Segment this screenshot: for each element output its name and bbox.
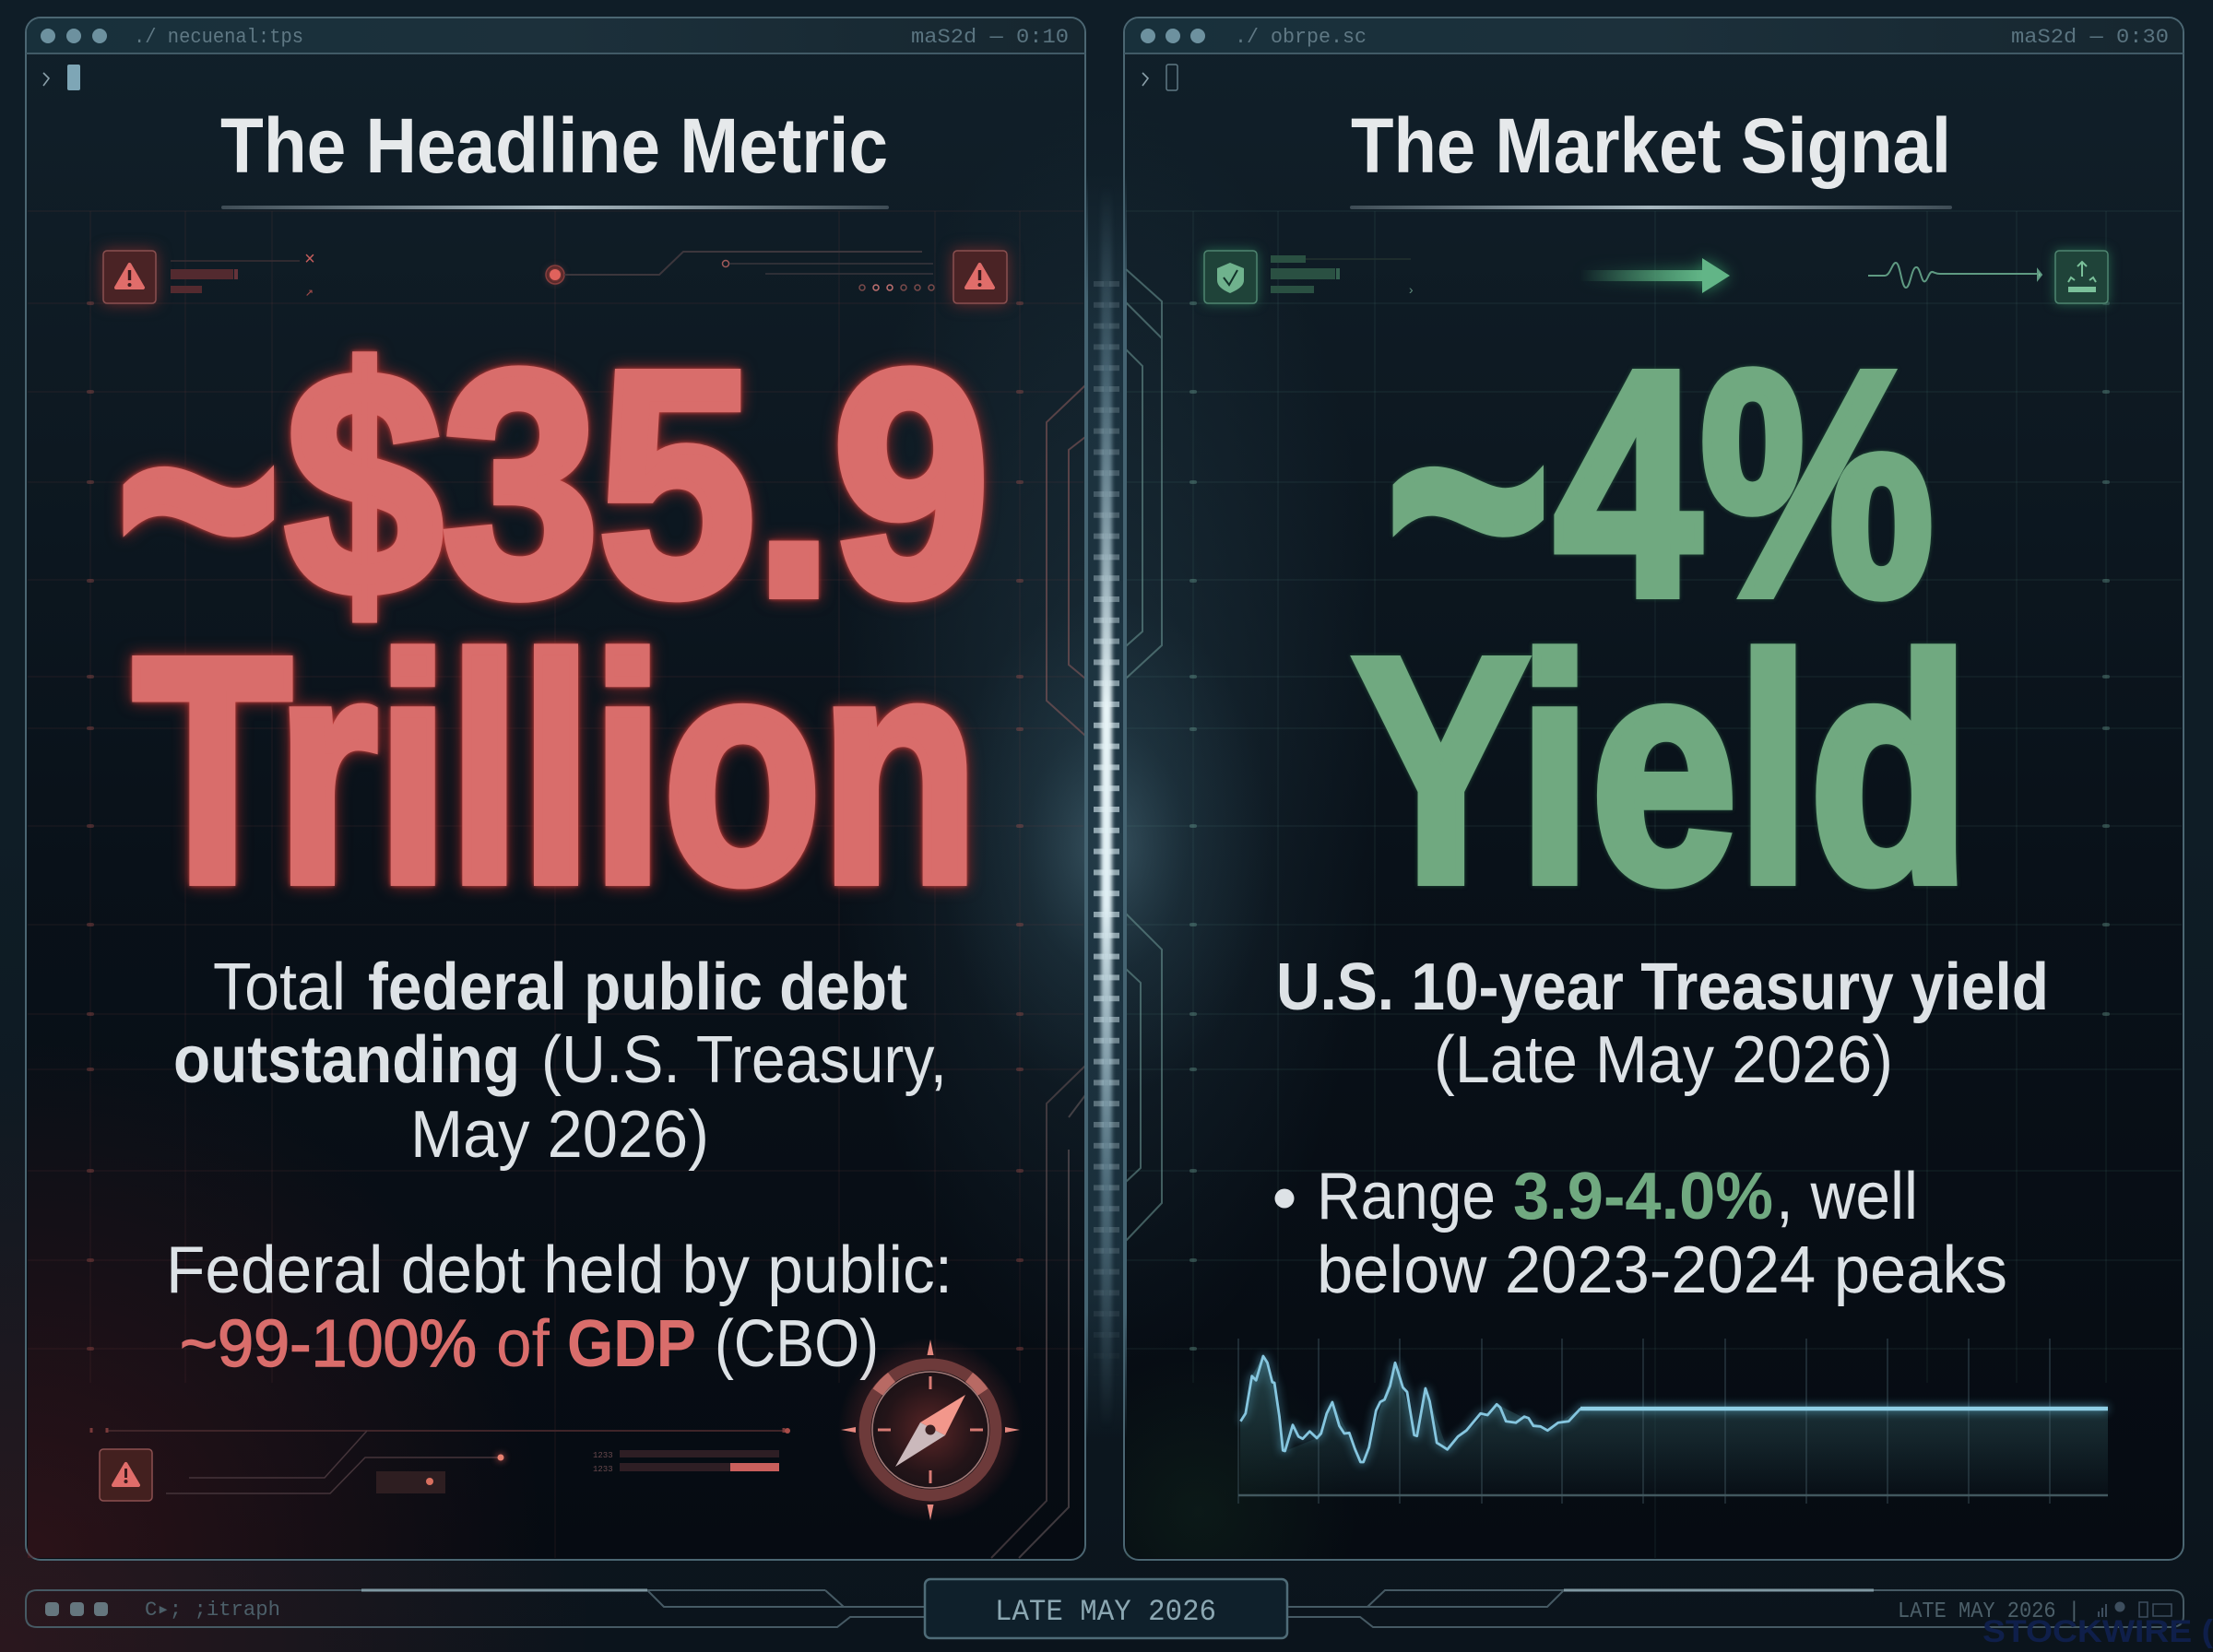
description text: May 2026) [410,1098,709,1172]
arrow [1580,258,1730,293]
lower status strip [91,1428,790,1501]
channel fill [1087,175,1124,1438]
status node and circuit [546,252,934,290]
big number: ~ [116,285,280,707]
status bars left: × [304,250,315,271]
description text: outstanding [173,1023,520,1097]
chart fill [1240,1356,2108,1495]
center glow on left panel [830,111,1084,1364]
signal wave [1868,263,2041,288]
terminal prompt [1142,65,1178,90]
description text: federal public debt [368,950,907,1024]
channel dashes [1094,281,1119,1401]
bullet text: Range [1317,1160,1496,1233]
channel light beam [1101,184,1112,1429]
footer left frame [26,1590,925,1627]
channel core glow [1084,599,1125,1097]
title underline [221,206,889,209]
big number [116,285,989,949]
center data channel [1084,111,1125,1438]
chart flat line [1580,1407,2108,1410]
icon: warning left [103,251,156,303]
channel glow [1084,111,1125,1364]
icon: upload box [2055,251,2108,303]
grid lines [1126,211,2182,1558]
window header: maS2d — 0:30 [2011,26,2169,49]
footer left dots [45,1602,108,1616]
terminal prompt [43,65,80,90]
window header: ./ obrpe.sc [1235,26,1367,49]
status bars left: ↗ [305,285,314,301]
status bars right [1271,255,1414,299]
footer date box [925,1579,1287,1638]
window header [1124,18,2183,53]
description text: ~99-100% [180,1307,477,1381]
center glow on right panel [1125,111,1383,1364]
window header [26,18,1085,53]
big number: $35.9 [286,306,989,662]
panel: the market signal [1124,18,2183,1560]
description text: Federal debt held by public: [166,1233,953,1307]
title: The Market Signal [1351,102,1951,189]
channel rails [1086,175,1125,1438]
panel red corner glow [28,1042,544,1558]
window header: maS2d — 0:10 [911,26,1069,49]
big number [1354,285,1970,949]
big number: ~ [1386,285,1550,707]
title: The Headline Metric [220,102,888,189]
panel: the headline metric [26,18,1085,1560]
footer right frame [1288,1590,2183,1627]
description text: (U.S. Treasury, [541,1023,947,1097]
lower status strip: 1233 [593,1465,613,1474]
chart baseline [1238,1494,2108,1496]
lower status strip: 1233 [593,1451,613,1460]
panel frame [26,18,1085,1560]
big number: 4% [1555,306,1934,662]
description text: of [496,1307,550,1381]
footer left text: C▸; ;itraph [145,1599,280,1622]
footer status icons [2098,1602,2172,1617]
bullet text: below 2023-2024 peaks [1317,1233,2007,1307]
description text: U.S. 10-year Treasury yield [1276,950,2049,1024]
bullet text [1274,1160,2007,1307]
big number: Yield [1354,593,1970,949]
footer bar [26,1579,2213,1649]
icon: compass [838,1338,1023,1522]
icon: shield [1204,251,1257,303]
side circuit traces [1126,269,1162,1241]
line chart [1238,1339,2108,1504]
status bars right: › [1407,284,1414,299]
watermark: STOCKWIRE ( [1982,1614,2213,1649]
big number: Trillion [134,593,978,949]
icon: warning right [953,251,1007,303]
status bars left [171,250,315,301]
description text [166,950,953,1381]
side circuit traces [991,385,1085,1558]
footer date box: LATE MAY 2026 [995,1595,1216,1629]
description text: (Late May 2026) [1434,1023,1893,1097]
panel green corner glow [1126,1355,1366,1558]
chart grid [1238,1339,2050,1504]
grid lines [28,211,1083,1558]
description text: (CBO) [715,1307,879,1381]
bullet text: , well [1776,1160,1918,1233]
chart wiggle line [1240,1356,1580,1462]
window header: ./ necuenal:tps [134,26,303,49]
bullet text: 3.9-4.0% [1513,1160,1773,1233]
title underline [1350,206,1952,209]
footer right text: LATE MAY 2026 | [1898,1599,2080,1624]
panel frame [1124,18,2183,1560]
description text: GDP [567,1307,696,1381]
description text: Total [213,950,346,1024]
description text [1276,950,2049,1097]
